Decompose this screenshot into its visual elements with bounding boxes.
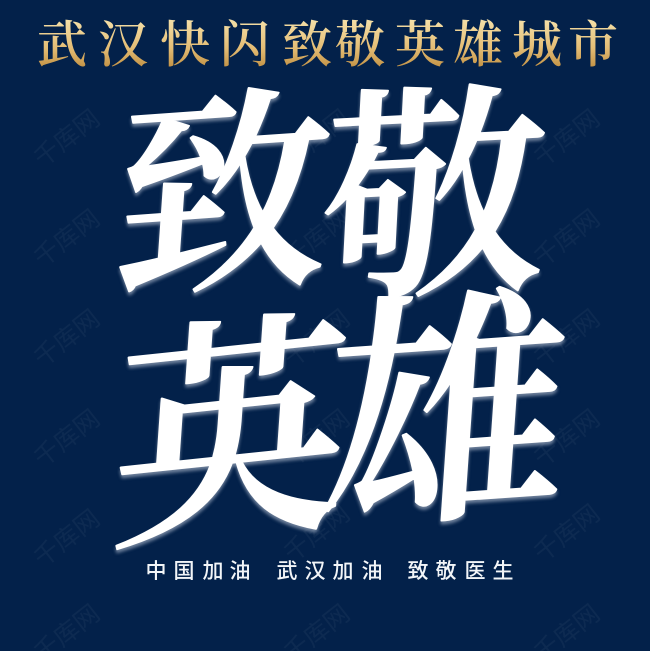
watermark pattern: 千库网	[279, 405, 355, 473]
character 致: 致	[107, 71, 339, 327]
watermark pattern: 千库网	[29, 505, 105, 573]
title: gold banner line: 武汉快闪致敬英雄城市	[37, 17, 618, 73]
watermark pattern: 千库网	[279, 105, 355, 173]
watermark pattern: 千库网	[279, 305, 355, 373]
character 雄: 雄	[314, 273, 577, 563]
watermark pattern: 千库网	[529, 105, 605, 173]
watermark pattern: 千库网	[529, 405, 605, 473]
watermark pattern: 千库网	[279, 500, 355, 568]
main heading: 致敬英雄	[104, 69, 577, 583]
subtitle slogans: 中国加油武汉加油致敬医生	[146, 560, 514, 583]
character 敬: 敬	[315, 69, 553, 331]
watermark pattern: 千库网	[29, 105, 105, 173]
watermark pattern: 千库网	[529, 205, 605, 273]
watermark pattern: 千库网	[29, 305, 105, 373]
watermark pattern: 千库网	[529, 500, 605, 568]
watermark pattern	[29, 105, 605, 651]
character 英: 英	[104, 295, 357, 583]
watermark pattern: 千库网	[529, 305, 605, 373]
watermark pattern: 千库网	[29, 205, 105, 273]
watermark pattern: 千库网	[279, 205, 355, 273]
watermark pattern: 千库网	[29, 405, 105, 473]
